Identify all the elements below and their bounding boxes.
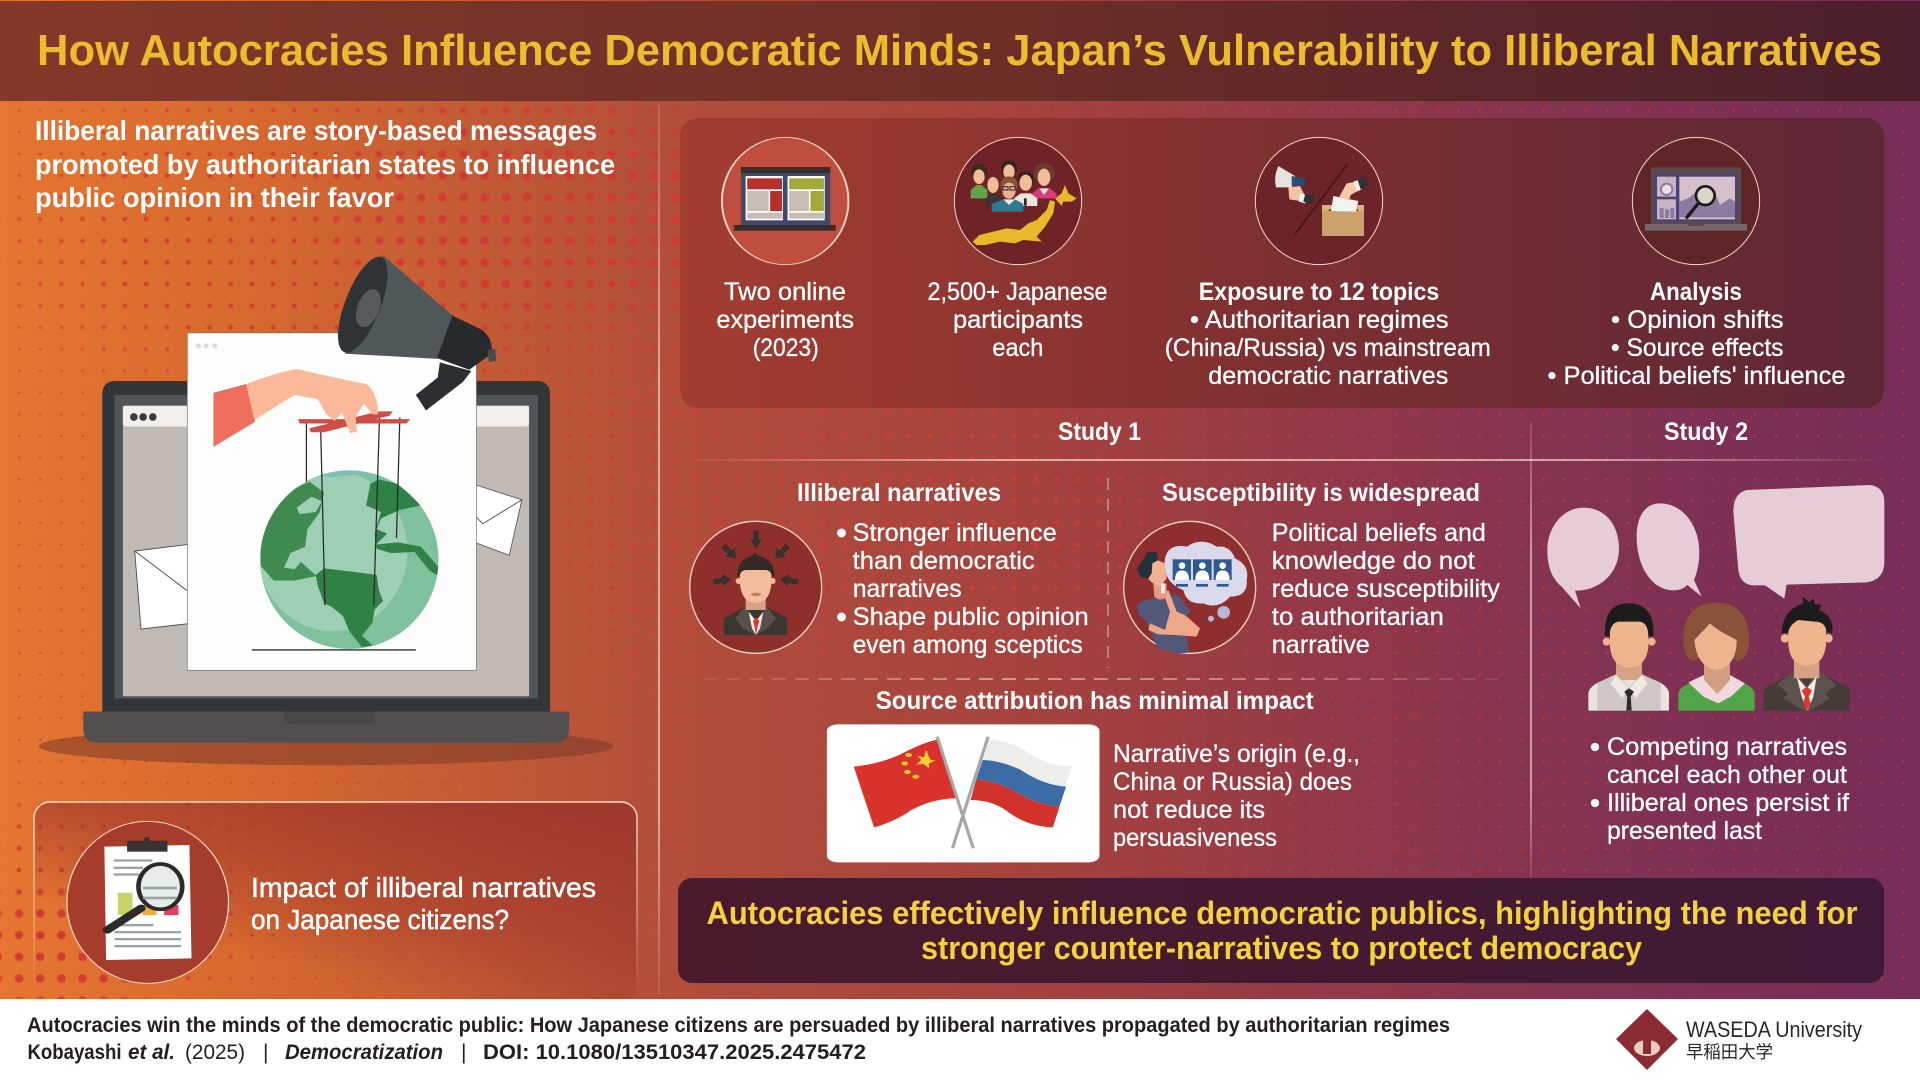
method 4: analysis [1548, 137, 1846, 390]
method 4 text: • Opinion shifts [1611, 306, 1784, 334]
method 4 text: • Source effects [1611, 334, 1784, 362]
envelope right [463, 481, 522, 555]
person 1 [1588, 603, 1669, 711]
susceptibility text: Political beliefs and [1272, 519, 1486, 547]
puppet strings [306, 412, 400, 605]
study 2 text: Competing narratives [1607, 733, 1847, 761]
citation: (2025) [185, 1041, 245, 1064]
footer [0, 999, 1920, 1080]
question text: on Japanese citizens? [251, 904, 509, 935]
study 2 text: Illiberal ones persist if [1607, 789, 1849, 817]
icon: laptop with pages [722, 137, 848, 265]
illiberal narratives bullets: than democratic [853, 547, 1035, 575]
source attribution text: China or Russia) does [1113, 768, 1352, 796]
method 1 text [716, 278, 854, 362]
finding: susceptibility [1124, 479, 1500, 659]
person 2 [1678, 603, 1755, 711]
intro text [35, 115, 615, 213]
method 2 text: each [992, 334, 1043, 362]
study 2 text [1591, 733, 1849, 845]
person 3 [1763, 597, 1850, 711]
title: How Autocracies Influence Democratic Minds: Japan’s Vulnerability to Illiberal Narratives [37, 26, 1882, 75]
citation: DOI: 10.1080/13510347.2025.2475472 [483, 1041, 866, 1064]
envelope left [135, 543, 198, 629]
method 1 text: (2023) [753, 334, 819, 362]
illiberal narratives bullets [837, 519, 1089, 659]
people [971, 160, 1057, 212]
method 1 text: experiments [716, 306, 854, 334]
header band [0, 1, 1920, 101]
intro text: Illiberal narratives are story-based messages [35, 115, 597, 146]
question text [251, 872, 596, 935]
study 1 heading: Study 1 [1058, 418, 1141, 446]
citation: Kobayashi [28, 1041, 122, 1064]
method 2: participants [928, 137, 1108, 362]
icon: clipboard with magnifier [67, 821, 229, 983]
method 3 text: democratic narratives [1208, 362, 1448, 390]
method 4 text: • Political beliefs' influence [1548, 362, 1846, 390]
conclusion text: stronger counter-narratives to protect democracy [921, 930, 1642, 966]
vertical divider left [658, 105, 660, 995]
heading: susceptibility: Susceptibility is widespread [1162, 479, 1480, 507]
citation: et al. [128, 1041, 175, 1064]
susceptibility text: knowledge do not [1272, 547, 1475, 575]
web page sheet [187, 333, 476, 670]
Waseda logo [1616, 1009, 1862, 1070]
method 3 text [1165, 278, 1491, 390]
method 3: exposure to topics [1165, 137, 1491, 390]
icon: thinking person with bubble [1124, 521, 1256, 653]
method 2 text [928, 278, 1108, 362]
conclusion bar [678, 878, 1884, 983]
panel: methods [680, 118, 1884, 408]
heading: source attribution: Source attribution has minimal impact [876, 687, 1314, 715]
conclusion text [706, 895, 1858, 966]
source attribution text: persuasiveness [1113, 824, 1277, 852]
illiberal narratives bullets: Stronger influence [853, 519, 1057, 547]
susceptibility text: narrative [1272, 631, 1370, 659]
citation: Autocracies win the minds of the democratic public: How Japanese citizens are persuaded by illiberal narratives propagated by authoritarian regimes [27, 1014, 1450, 1037]
study 2 text: cancel each other out [1607, 761, 1847, 789]
citation: | [263, 1041, 268, 1064]
megaphone [328, 250, 497, 411]
Waseda logo: 早稲田大学 [1686, 1039, 1773, 1064]
susceptibility text: to authoritarian [1272, 603, 1444, 631]
heading: illiberal narratives: Illiberal narratives [797, 479, 1001, 507]
susceptibility text: reduce susceptibility [1272, 575, 1500, 603]
illiberal narratives bullets: narratives [853, 575, 962, 603]
source attribution text: not reduce its [1113, 796, 1265, 824]
study 2 text: presented last [1607, 817, 1762, 845]
citation: Democratization [285, 1041, 443, 1064]
method 4 text [1548, 278, 1846, 390]
icon: dashboard with magnifier [1632, 137, 1760, 265]
finding: illiberal narratives [690, 479, 1089, 659]
citation: | [461, 1041, 466, 1064]
hand [213, 369, 378, 447]
study 2 heading: Study 2 [1664, 418, 1748, 446]
question text: Impact of illiberal narratives [251, 872, 596, 903]
control bars [298, 411, 410, 432]
method 1: two online experiments [716, 137, 854, 362]
laptop shadow [39, 727, 614, 765]
icon: China and Russia flags [827, 724, 1099, 862]
source attribution text [1113, 740, 1360, 852]
method 3 text: • Authoritarian regimes [1190, 306, 1449, 334]
icon: megaphone and ballot box [1255, 137, 1383, 265]
source attribution text: Narrative’s origin (e.g., [1113, 740, 1360, 768]
method 3 text: Exposure to 12 topics [1199, 278, 1439, 306]
research question panel [34, 802, 637, 1002]
study 2 illustration: three people with speech bubbles [1547, 485, 1884, 711]
illiberal narratives bullets: even among sceptics [853, 631, 1083, 659]
intro text: public opinion in their favor [35, 182, 394, 213]
icon: pressured person [690, 521, 822, 653]
illiberal narratives bullets: Shape public opinion [853, 603, 1089, 631]
Waseda logo: WASEDA University [1686, 1017, 1862, 1042]
method 2 text: participants [953, 306, 1083, 334]
method 3 text: (China/Russia) vs mainstream [1165, 334, 1491, 362]
method 1 text: Two online [724, 278, 846, 306]
icon: people and Japan map [954, 137, 1082, 265]
conclusion text: Autocracies effectively influence democratic publics, highlighting the need for [706, 895, 1858, 931]
globe [252, 466, 440, 650]
method 4 text: Analysis [1650, 278, 1742, 306]
citation [27, 1014, 1450, 1064]
finding: source attribution [827, 687, 1360, 862]
illustration: laptop, puppet globe and megaphone [39, 250, 614, 765]
intro text: promoted by authoritarian states to influence [35, 149, 615, 180]
speech bubbles [1547, 485, 1884, 608]
method 2 text: 2,500+ Japanese [928, 278, 1108, 306]
laptop [83, 381, 569, 743]
susceptibility text [1272, 519, 1500, 659]
